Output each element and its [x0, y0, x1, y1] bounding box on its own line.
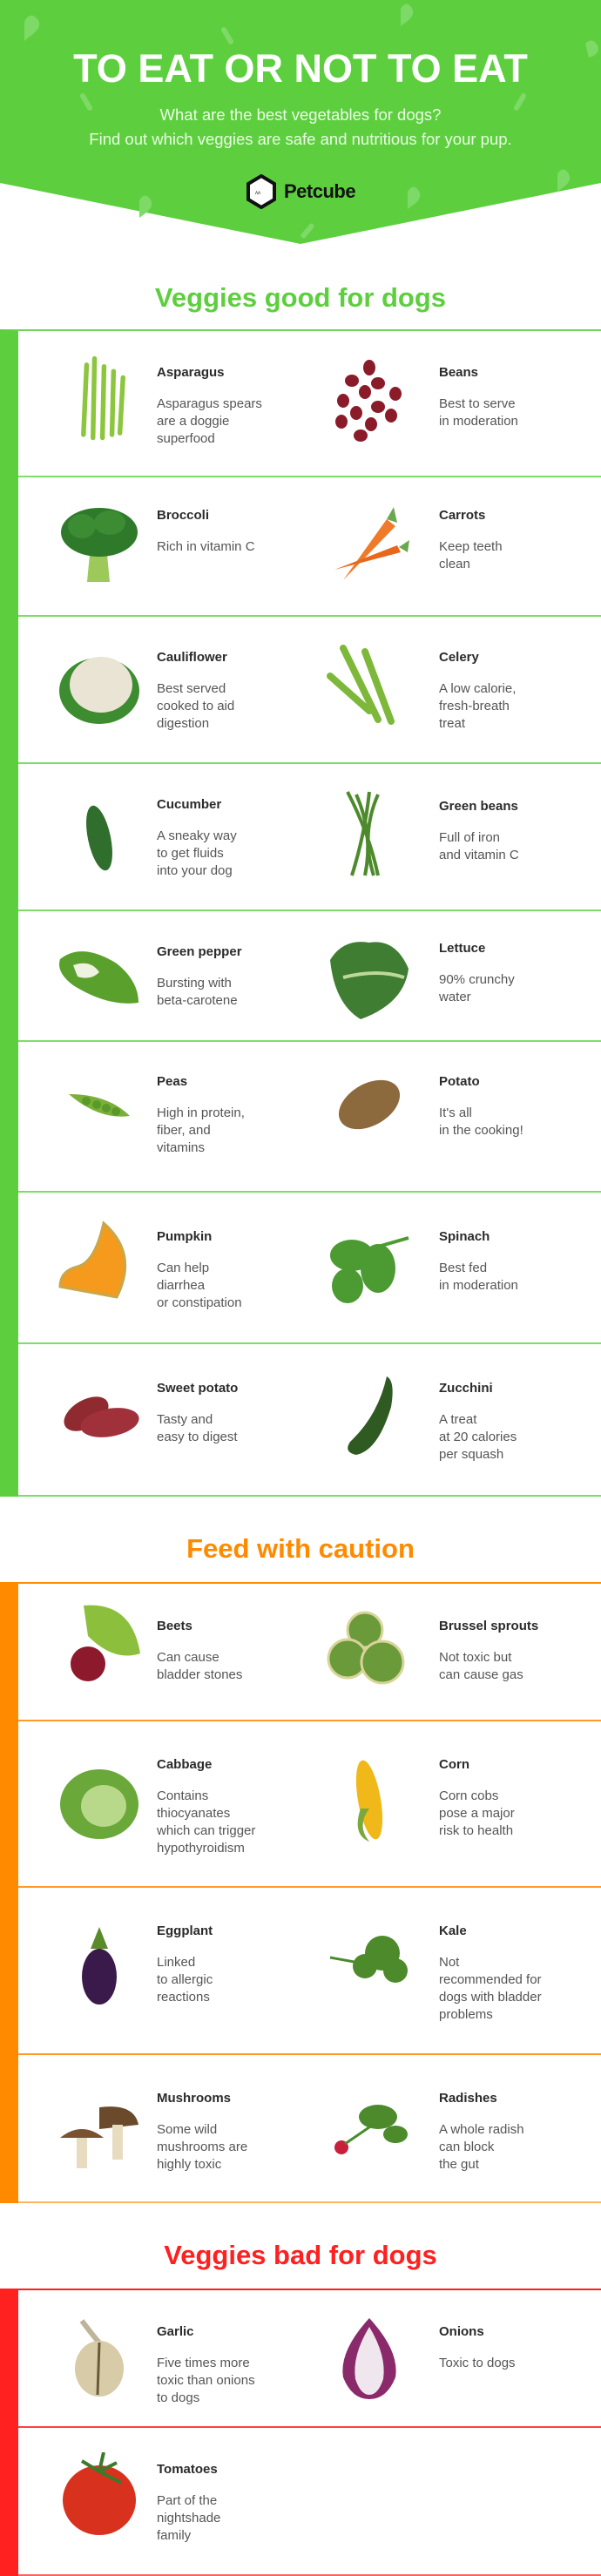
text: potato	[439, 1074, 523, 1138]
text: mushrooms: Mushrooms	[157, 2091, 231, 2106]
row: beets / brussel sprouts	[18, 1584, 601, 1721]
logo: Petcube: ʌʌ	[255, 191, 260, 196]
icon: onion	[326, 2316, 413, 2404]
icon: radishes	[326, 2086, 413, 2174]
text: cabbage: thiocyanates	[157, 1806, 230, 1821]
logo: Petcube: Petcube	[284, 180, 355, 202]
text: brussel sprouts: Not toxic but	[439, 1650, 511, 1665]
text: zucchini	[439, 1381, 517, 1462]
text: broccoli: Rich in vitamin C	[157, 539, 255, 554]
subtitle	[89, 105, 512, 148]
text: green pepper	[157, 944, 242, 1008]
text: sweet potato: Tasty and	[157, 1412, 213, 1427]
row: eggplant / kale	[18, 1888, 601, 2055]
icon: cauliflower	[59, 657, 139, 724]
text: sweet potato: easy to digest	[157, 1430, 238, 1444]
icon: lettuce	[330, 942, 409, 1019]
text: broccoli	[157, 508, 255, 554]
text: asparagus: Asparagus	[157, 365, 225, 380]
heading: good: Veggies good for dogs	[155, 282, 446, 313]
text: radishes: the gut	[439, 2157, 479, 2172]
text: cauliflower: Cauliflower	[157, 650, 227, 665]
text: celery: Celery	[439, 650, 479, 665]
text: pumpkin: or constipation	[157, 1295, 242, 1310]
text: garlic	[157, 2323, 255, 2407]
text: pumpkin: diarrhea	[157, 1278, 205, 1293]
icon: potato	[338, 1080, 400, 1129]
text: corn: Corn	[439, 1757, 469, 1772]
panel: good veggies	[0, 329, 601, 1497]
text: garlic: Garlic	[157, 2324, 194, 2339]
icon: eggplant	[56, 1923, 143, 2010]
text: brussel sprouts: can cause gas	[439, 1667, 523, 1682]
icon: celery	[327, 645, 395, 725]
text: beets: Can cause	[157, 1650, 219, 1665]
text: celery: treat	[439, 716, 465, 731]
text: zucchini: per squash	[439, 1447, 503, 1462]
text: zucchini: A treat	[439, 1412, 476, 1427]
text: cabbage: which can trigger	[157, 1823, 255, 1838]
text: corn	[439, 1756, 515, 1840]
text: zucchini: Zucchini	[439, 1381, 493, 1396]
text: cucumber: A sneaky way	[157, 828, 237, 843]
icon: pumpkin	[59, 1220, 127, 1299]
text: pumpkin: Can help	[157, 1261, 209, 1275]
icon: green beans	[346, 791, 380, 876]
text: green pepper: beta-carotene	[157, 993, 238, 1008]
text: tomatoes	[157, 2461, 220, 2545]
text: carrots: Keep teeth	[439, 539, 503, 554]
row: tomatoes	[18, 2428, 601, 2576]
panel: bad veggies	[0, 2289, 601, 2576]
text: beans: Best to serve	[439, 396, 516, 411]
text: peas	[157, 1074, 245, 1155]
text: eggplant: Eggplant	[157, 1924, 213, 1938]
icon: corn	[326, 1756, 413, 1843]
row: mushrooms / radishes	[18, 2055, 601, 2203]
text: corn: pose a major	[439, 1806, 515, 1821]
text: mushrooms: mushrooms are	[157, 2140, 247, 2154]
text: asparagus: superfood	[157, 431, 215, 446]
text: asparagus: Asparagus spears	[157, 396, 262, 411]
text: brussel sprouts	[439, 1619, 538, 1682]
text: peas: vitamins	[157, 1140, 205, 1155]
text: tomatoes: nightshade	[157, 2511, 220, 2525]
icon: garlic	[56, 2316, 143, 2404]
text: eggplant: reactions	[157, 1990, 210, 2005]
text: mushrooms	[157, 2090, 247, 2174]
text: cauliflower: cooked to aid	[157, 699, 234, 713]
text: sweet potato: Sweet potato	[157, 1381, 238, 1396]
text: peas: fiber, and	[157, 1123, 211, 1138]
text: spinach: in moderation	[439, 1278, 518, 1293]
text: garlic: to dogs	[157, 2390, 199, 2405]
text: tomatoes: Part of the	[157, 2493, 217, 2508]
text: corn: risk to health	[439, 1823, 513, 1838]
icon: zucchini	[348, 1376, 393, 1455]
text: cucumber: to get fluids	[157, 846, 224, 861]
text: carrots	[439, 508, 503, 571]
text: onions: Toxic to dogs	[439, 2356, 516, 2370]
heading: caution: Feed with caution	[186, 1533, 415, 1564]
icon: cucumber	[86, 805, 112, 871]
text: cabbage: Cabbage	[157, 1757, 212, 1772]
text: carrots: Carrots	[439, 508, 485, 523]
text: garlic: toxic than onions	[157, 2373, 255, 2388]
text: eggplant: to allergic	[157, 1972, 213, 1987]
text: kale: problems	[439, 2007, 493, 2022]
row: peas / potato	[18, 1042, 601, 1193]
text: spinach: Best fed	[439, 1261, 487, 1275]
icon: kale	[326, 1923, 413, 2010]
text: spinach: Spinach	[439, 1229, 490, 1244]
text: green beans	[439, 799, 519, 862]
text: celery	[439, 650, 516, 731]
row: green pepper / lettuce	[18, 911, 601, 1042]
text: corn: Corn cobs	[439, 1788, 498, 1803]
header banner	[0, 0, 601, 244]
text: potato: in the cooking!	[439, 1123, 523, 1138]
text: cauliflower: digestion	[157, 716, 209, 731]
text: beans: Beans	[439, 365, 478, 380]
icon: green pepper	[59, 951, 138, 1004]
row: asparagus / beans	[18, 331, 601, 477]
row: sweet potato / zucchini	[18, 1344, 601, 1497]
row: cabbage / corn	[18, 1721, 601, 1888]
text: beets	[157, 1619, 242, 1682]
text: cabbage	[157, 1756, 255, 1857]
text: cauliflower	[157, 650, 234, 731]
icon: asparagus	[81, 355, 125, 441]
text: mushrooms: highly toxic	[157, 2157, 221, 2172]
text: potato: It's all	[439, 1105, 472, 1120]
icon: sweet potato	[64, 1396, 139, 1437]
text: onions: Onions	[439, 2324, 484, 2339]
text: green pepper: Bursting with	[157, 976, 232, 991]
text: radishes: Radishes	[439, 2091, 497, 2106]
panel: caution veggies	[0, 1582, 601, 2203]
text: peas: Peas	[157, 1074, 187, 1089]
text: tomatoes: family	[157, 2528, 191, 2543]
logo: Petcube	[246, 174, 355, 209]
icon: broccoli	[61, 508, 138, 582]
text: peas: High in protein,	[157, 1105, 245, 1120]
text: mushrooms: Some wild	[157, 2122, 217, 2137]
text: lettuce	[439, 941, 515, 1004]
text: broccoli: Broccoli	[157, 508, 209, 523]
row: cucumber / green beans	[18, 764, 601, 911]
text: radishes: A whole radish	[439, 2122, 524, 2137]
heading: bad: Veggies bad for dogs	[164, 2240, 437, 2270]
text: celery: A low calorie,	[439, 681, 516, 696]
text: tomatoes: Tomatoes	[157, 2462, 218, 2477]
icon: beans	[335, 360, 402, 442]
icon: peas	[69, 1094, 130, 1117]
text: kale: recommended for	[439, 1972, 542, 1987]
text: eggplant: Linked	[157, 1955, 195, 1970]
icon: brussel sprouts	[328, 1612, 404, 1685]
icon: mushrooms	[56, 2090, 143, 2177]
text: lettuce: 90% crunchy	[439, 972, 515, 987]
text: sweet potato	[157, 1381, 238, 1444]
text: green beans: Full of iron	[439, 830, 500, 845]
text: pumpkin	[157, 1229, 242, 1310]
row: broccoli / carrots	[18, 477, 601, 617]
text: radishes	[439, 2090, 524, 2174]
text: beans	[439, 365, 518, 429]
text: asparagus: are a doggie	[157, 414, 229, 429]
text: beets: Beets	[157, 1619, 192, 1633]
text: cucumber: into your dog	[157, 863, 233, 878]
text: green beans: and vitamin C	[439, 848, 519, 862]
text: lettuce: Lettuce	[439, 941, 485, 956]
icon: spinach	[330, 1236, 409, 1303]
text: garlic: Five times more	[157, 2356, 250, 2370]
text: celery: fresh-breath	[439, 699, 510, 713]
subtitle: What are the best vegetables for dogs?	[160, 105, 441, 124]
text: zucchini: at 20 calories	[439, 1430, 517, 1444]
text: asparagus	[157, 365, 262, 446]
text: brussel sprouts: Brussel sprouts	[439, 1619, 538, 1633]
subtitle: Find out which veggies are safe and nutritious for your pup.	[89, 130, 512, 148]
text: kale: dogs with bladder	[439, 1990, 542, 2005]
text: pumpkin: Pumpkin	[157, 1229, 212, 1244]
text: cabbage: hypothyroidism	[157, 1841, 245, 1856]
text: radishes: can block	[439, 2140, 494, 2154]
text: cabbage: Contains	[157, 1788, 208, 1803]
icon: carrots	[334, 507, 409, 580]
text: kale	[439, 1923, 542, 2024]
text: eggplant	[157, 1923, 213, 2006]
icon: tomato	[56, 2452, 143, 2539]
title: TO EAT OR NOT TO EAT	[73, 46, 528, 91]
text: beets: bladder stones	[157, 1667, 242, 1682]
text: spinach	[439, 1229, 518, 1293]
text: kale: Not	[439, 1955, 459, 1970]
row: cauliflower / celery	[18, 617, 601, 764]
icon: cabbage	[60, 1769, 138, 1839]
row: pumpkin / spinach	[18, 1193, 601, 1344]
text: cucumber: Cucumber	[157, 797, 221, 812]
text: cauliflower: Best served	[157, 681, 226, 696]
text: potato: Potato	[439, 1074, 480, 1089]
text: kale: Kale	[439, 1924, 467, 1938]
text: onions	[439, 2323, 516, 2372]
row: garlic / onions	[18, 2290, 601, 2428]
text: lettuce: water	[439, 990, 471, 1004]
text: green pepper: Green pepper	[157, 944, 242, 959]
icon: beets	[71, 1605, 140, 1681]
text: green beans: Green beans	[439, 799, 518, 814]
text: carrots: clean	[439, 557, 470, 571]
text: cucumber	[157, 797, 237, 878]
text: beans: in moderation	[439, 414, 518, 429]
